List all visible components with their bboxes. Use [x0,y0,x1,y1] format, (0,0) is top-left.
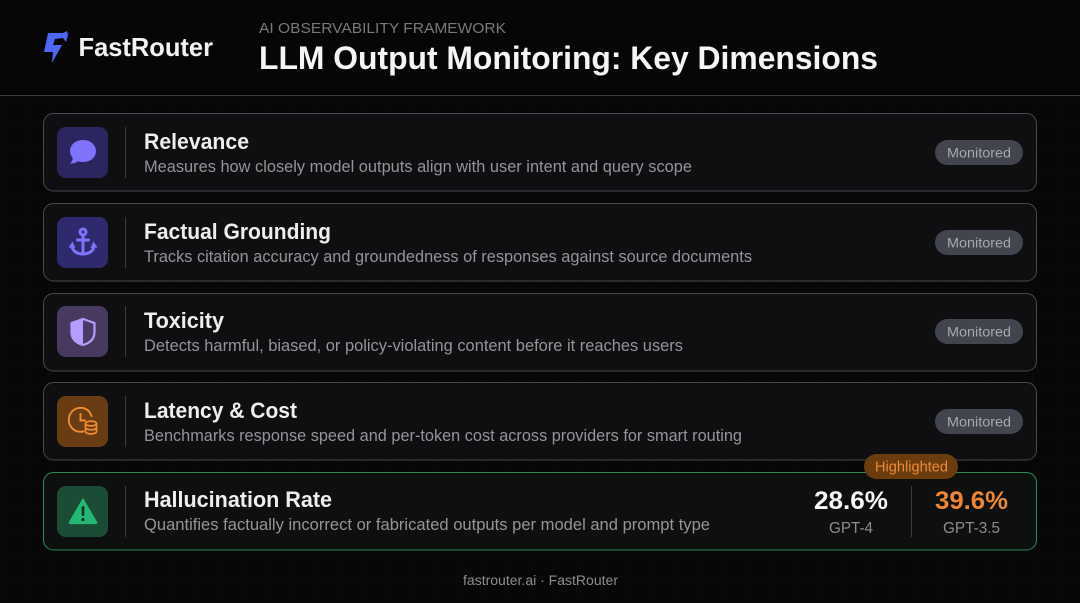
badge: monitored [935,140,1023,165]
badge: monitored: Monitored [947,144,1011,160]
panel: latency and cost [44,382,1036,460]
description: Measures how closely model outputs align with user intent and query scope [144,158,692,176]
title: LLM Output Monitoring: Key Dimensions [259,40,878,76]
panel: toxicity [44,294,1036,371]
description: Benchmarks response speed and per-token cost across providers for smart routing [144,427,742,445]
badge: monitored: Monitored [947,324,1011,340]
description: Quantifies factually incorrect or fabricated outputs per model and prompt type [144,516,710,534]
metric: GPT-3.5: GPT-3.5 [943,520,1000,537]
logo: FastRouter [44,31,213,63]
description: Detects harmful, biased, or policy-violating content before it reaches users [144,337,683,355]
icon: warning triangle [57,486,108,537]
metric: GPT-3.5: 39.6% [935,487,1008,515]
badge: monitored [935,409,1023,434]
panel: hallucination rate [44,454,1036,550]
icon: lightning arrow [44,31,68,63]
panel: factual grounding [44,204,1036,281]
badge: highlighted: Highlighted [875,460,948,476]
icon: anchor [57,217,108,268]
icon: shield [57,306,108,357]
badge: highlighted [864,454,958,479]
heading: Latency & Cost [144,398,298,423]
header [44,20,878,76]
icon: speech bubble [57,127,108,178]
heading: Hallucination Rate [144,487,332,512]
badge: monitored: Monitored [947,234,1011,250]
heading: Relevance [144,129,249,154]
metric: GPT-4: GPT-4 [829,520,873,537]
icon: clock and coins [57,396,108,447]
eyebrow: AI OBSERVABILITY FRAMEWORK [259,20,506,37]
badge: monitored [935,319,1023,344]
description: Tracks citation accuracy and groundedness of responses against source documents [144,248,752,266]
footer: fastrouter.ai · FastRouter [463,573,619,588]
metric: GPT-4 [814,487,888,537]
badge: monitored: Monitored [947,414,1011,430]
heading: Toxicity [144,308,225,333]
metric: GPT-3.5 [935,487,1008,537]
heading: Factual Grounding [144,219,331,244]
panel: relevance [44,114,1036,191]
badge: monitored [935,230,1023,255]
brand name: FastRouter [78,32,213,62]
metric: GPT-4: 28.6% [814,487,888,515]
